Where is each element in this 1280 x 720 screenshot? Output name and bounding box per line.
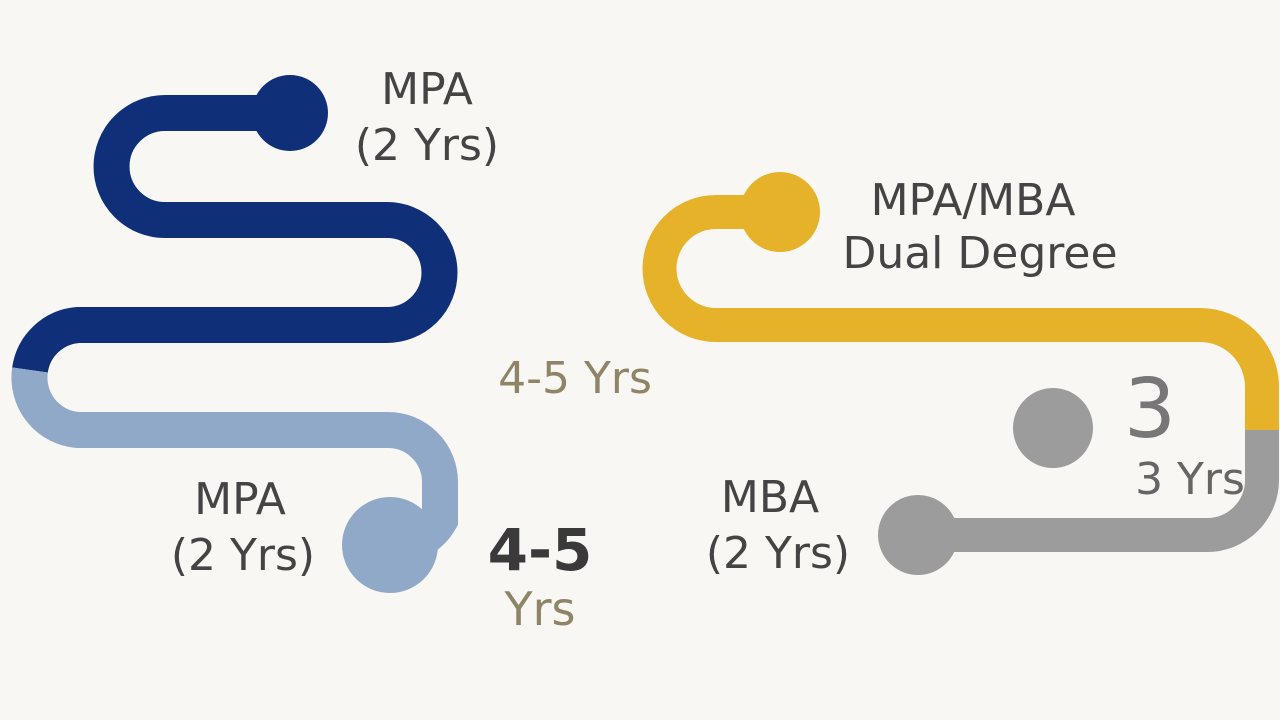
label: MPA bottom: (2 Yrs)	[171, 530, 315, 581]
label: MPA top: MPA	[381, 64, 473, 115]
icon: gray standalone circle	[1013, 388, 1093, 468]
label: MPA bottom	[171, 474, 315, 581]
icon: blue start circle	[252, 75, 328, 151]
label: 4-5 Yrs bottom	[488, 516, 592, 636]
label: MPA top: (2 Yrs)	[355, 120, 499, 171]
label: MBA: (2 Yrs)	[706, 528, 850, 579]
icon: light blue end circle	[342, 497, 438, 593]
label: MBA	[706, 472, 850, 579]
label: 3 Yrs: 3 Yrs	[1135, 454, 1245, 505]
label: MPA/MBA Dual Degree	[842, 175, 1118, 279]
label: 4-5 Yrs bottom: Yrs	[504, 582, 575, 636]
label: 4-5 Yrs bottom: 4-5	[488, 516, 592, 584]
label: MPA top	[355, 64, 499, 171]
label: MPA/MBA Dual Degree: Dual Degree	[842, 228, 1118, 279]
path: MPA blue serpentine	[29, 75, 440, 593]
icon: gold start circle	[740, 172, 820, 252]
label: 4-5 Yrs middle: 4-5 Yrs	[498, 353, 652, 404]
label: MPA bottom: MPA	[194, 474, 286, 525]
icon: gray circle MBA	[878, 495, 958, 575]
path: dual degree gold/gray	[660, 172, 1262, 575]
label: MBA: MBA	[721, 472, 819, 523]
label: MPA/MBA Dual Degree: MPA/MBA	[871, 175, 1075, 226]
label: 3 big: 3	[1124, 362, 1176, 457]
